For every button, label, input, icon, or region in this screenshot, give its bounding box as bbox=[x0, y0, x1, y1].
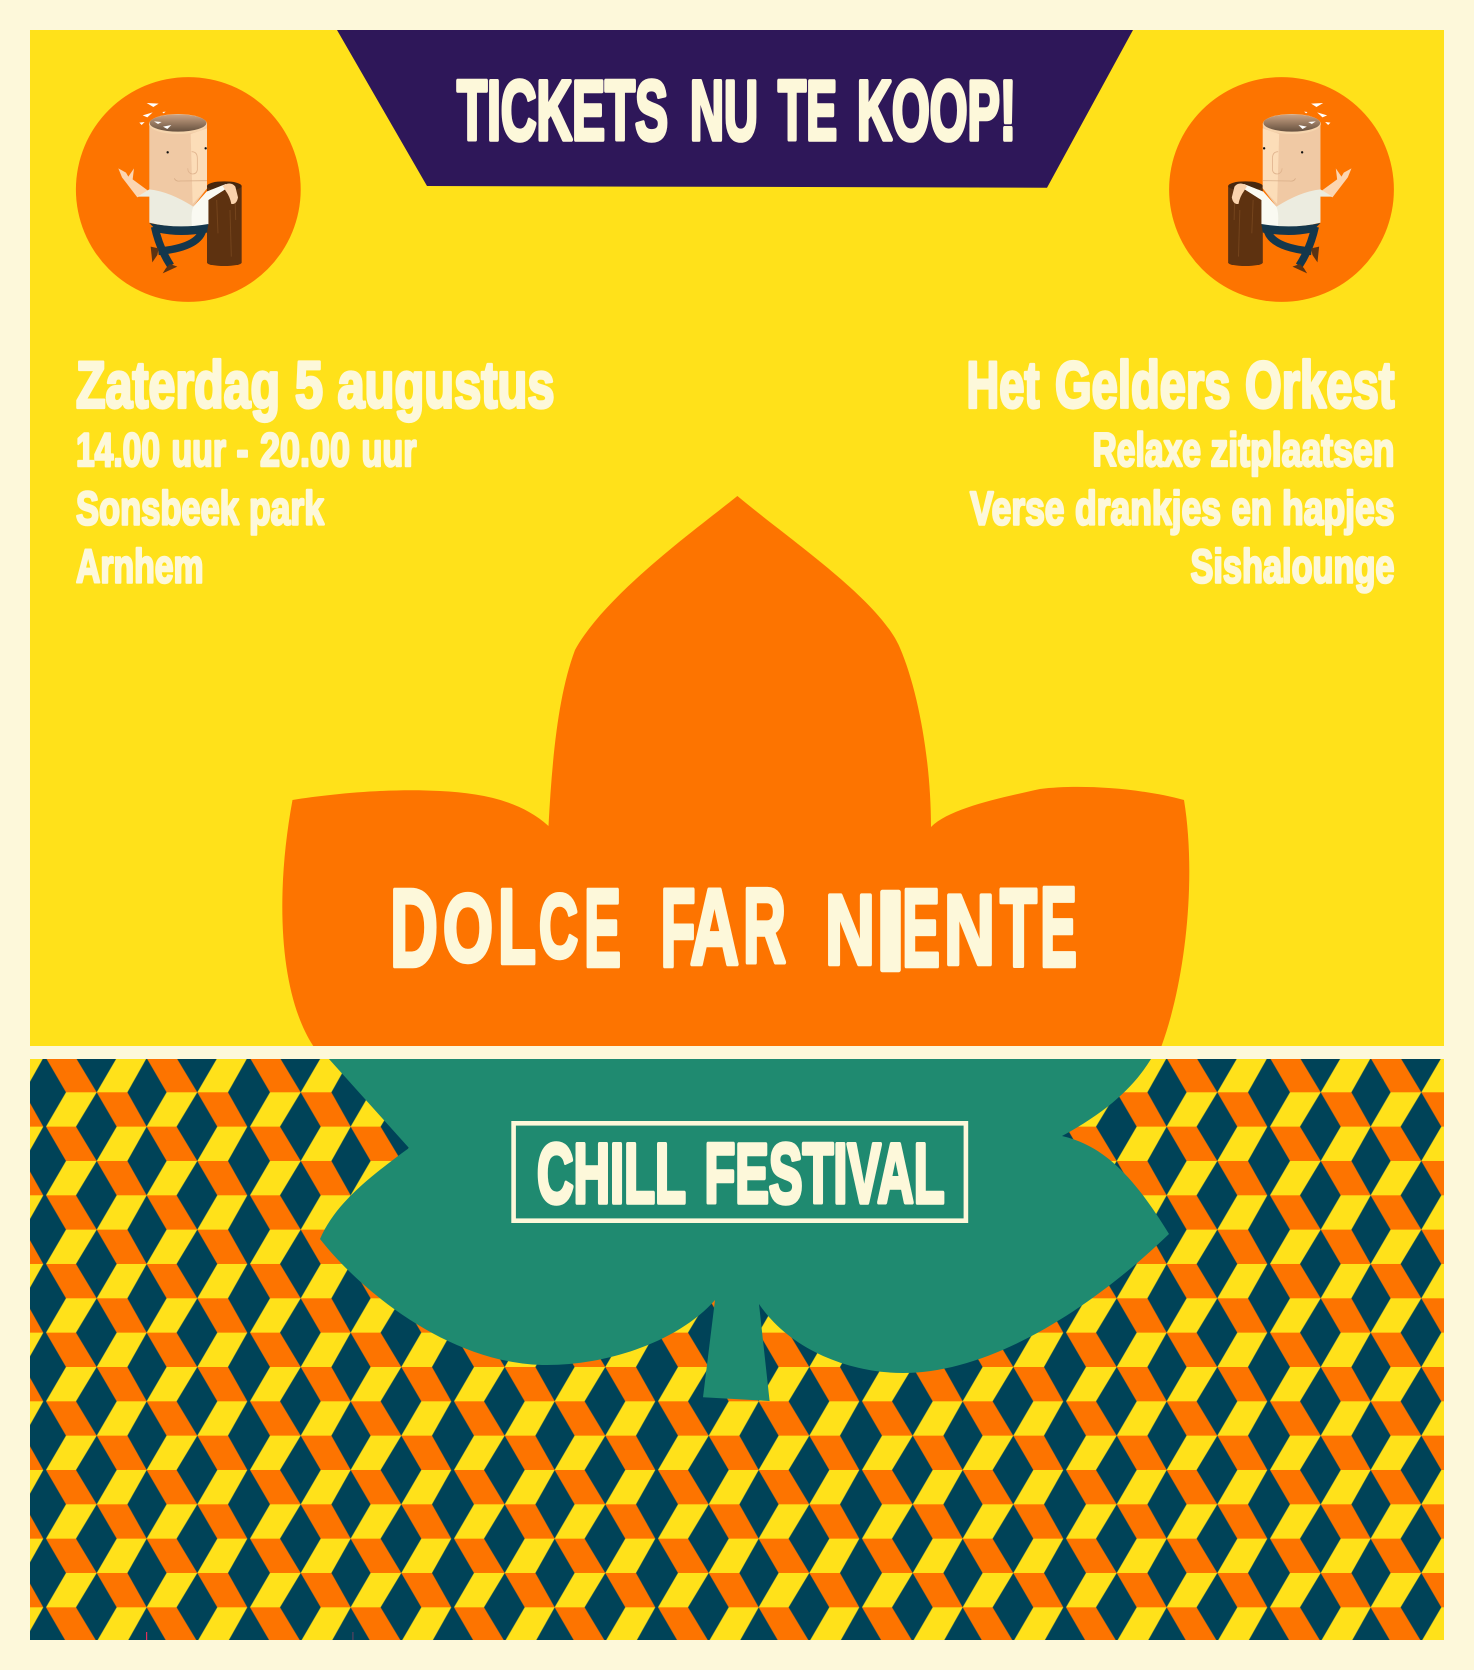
title: dolce far niente: A bbox=[690, 866, 739, 987]
orange leaf bbox=[282, 496, 1189, 1050]
title: dolce far niente: E bbox=[902, 867, 940, 990]
text block: programme details: Verse bbox=[970, 482, 1064, 535]
text block: programme details: hapjes bbox=[1282, 482, 1394, 535]
text block: programme details: Relaxe bbox=[1092, 424, 1201, 477]
title: dolce far niente: E bbox=[584, 867, 621, 990]
text block: date and place: 5 bbox=[295, 348, 323, 421]
text block: date and place: park bbox=[249, 482, 325, 535]
text block: date and place: 14.00 bbox=[76, 424, 160, 477]
festival label text: FESTIVAL bbox=[704, 1127, 944, 1221]
banner heading: NU bbox=[690, 63, 758, 157]
text block: date and place: augustus bbox=[338, 348, 554, 421]
festival label box bbox=[514, 1123, 966, 1221]
title: dolce far niente: F bbox=[660, 867, 696, 990]
banner: tickets bbox=[337, 30, 1133, 188]
text block: programme details: zitplaatsen bbox=[1210, 424, 1394, 477]
title: dolce far niente: T bbox=[1000, 867, 1037, 990]
title: dolce far niente: C bbox=[539, 877, 578, 977]
text block: date and place: 20.00 bbox=[260, 424, 350, 477]
icon: right circle with mirrored man bbox=[1169, 77, 1394, 302]
title: dolce far niente: I bbox=[875, 868, 906, 994]
text block: date and place bbox=[76, 348, 554, 594]
text block: programme details: Sishalounge bbox=[1190, 541, 1394, 594]
title: dolce far niente: L bbox=[498, 868, 536, 986]
text block: programme details: Orkest bbox=[1245, 348, 1395, 421]
panel: geometric cube pattern bbox=[30, 1059, 1444, 1640]
title: dolce far niente: D bbox=[390, 867, 438, 990]
panel: yellow top section: E bbox=[1040, 864, 1077, 990]
text block: date and place: Zaterdag bbox=[76, 348, 280, 421]
text block: date and place: Arnhem bbox=[76, 541, 204, 594]
text block: date and place: uur bbox=[362, 424, 416, 477]
icon: left circle with man leaning on log bbox=[76, 77, 301, 302]
text block: programme details: drankjes bbox=[1075, 482, 1221, 535]
text block: programme details bbox=[966, 348, 1395, 594]
text block: programme details: Gelders bbox=[1055, 348, 1230, 421]
banner heading: KOOP! bbox=[857, 63, 1016, 157]
text block: programme details: Het bbox=[966, 348, 1040, 421]
festival label text: CHILL bbox=[537, 1127, 685, 1221]
text block: date and place: Sonsbeek bbox=[76, 482, 240, 535]
green leaf bbox=[320, 1050, 1169, 1401]
text block: date and place: uur bbox=[172, 424, 226, 477]
text block: programme details: en bbox=[1232, 482, 1272, 535]
banner heading: TICKETS bbox=[457, 63, 668, 157]
title: dolce far niente bbox=[390, 864, 1077, 994]
panel: yellow top section bbox=[30, 30, 1444, 1050]
title: dolce far niente: R bbox=[743, 867, 786, 985]
title: dolce far niente: N bbox=[944, 874, 995, 985]
banner heading: TE bbox=[778, 63, 837, 157]
title: dolce far niente: O bbox=[443, 875, 493, 982]
text block: date and place: - bbox=[236, 424, 248, 477]
title: dolce far niente: N bbox=[825, 874, 875, 985]
